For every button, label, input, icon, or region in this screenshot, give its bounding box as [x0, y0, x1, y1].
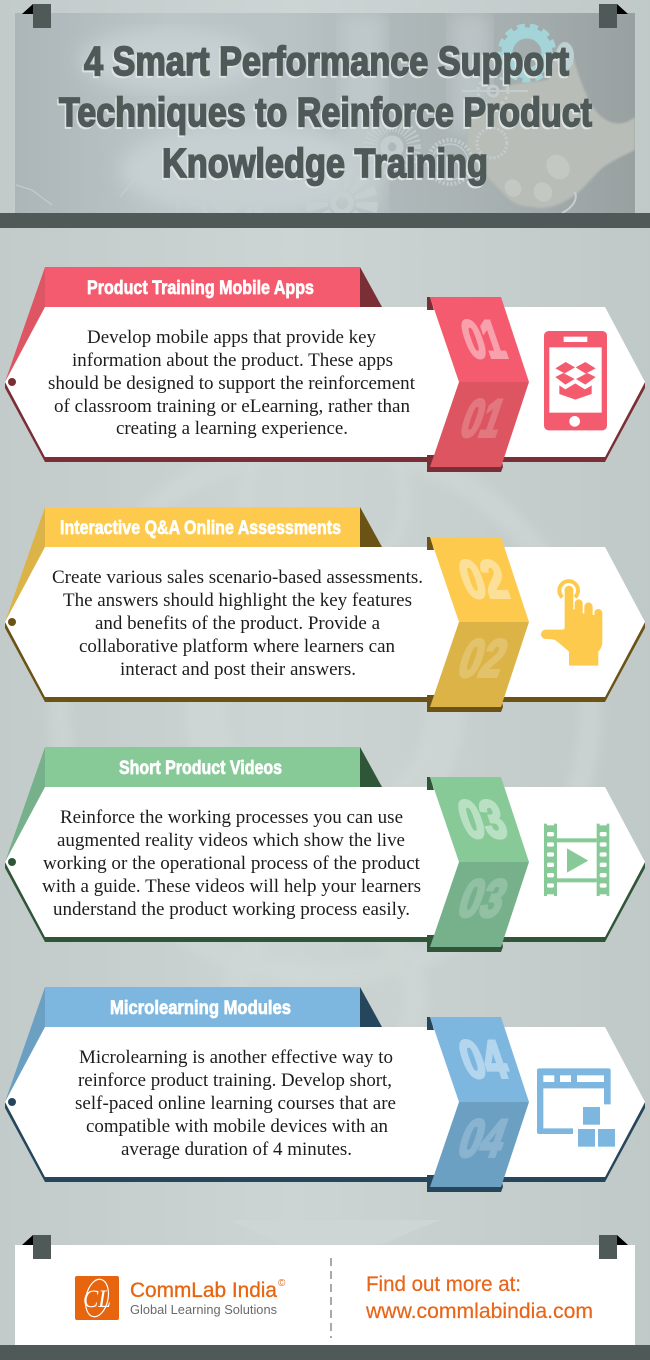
body text [75, 1048, 396, 1160]
body text: creating a learning experience. [116, 419, 348, 439]
title text [58, 38, 592, 188]
body text: of classroom training or eLearning, rather than [54, 397, 410, 417]
fingernails [501, 42, 574, 205]
lower watermark shape [228, 1220, 440, 1245]
banner photo background [15, 13, 635, 213]
hand [467, 43, 635, 208]
number chevron 02 [427, 537, 529, 712]
panel: footer [15, 1245, 635, 1345]
teal gear [500, 26, 554, 80]
number chevron 01 [427, 297, 529, 472]
title shadow: 4 Smart Performance Support [82, 40, 568, 86]
body text: self-paced online learning courses that are [75, 1094, 396, 1114]
icon: film strip with play button [544, 822, 609, 897]
title banner [15, 13, 635, 213]
number chevron 03: 03 [451, 790, 514, 849]
number chevron 03 [427, 777, 529, 952]
number chevron 03: 03 [451, 869, 515, 928]
heading [45, 987, 360, 1027]
title lines: Knowledge Training [162, 140, 488, 186]
call to action: www.commlabindia.com [365, 1300, 593, 1323]
footer pins [22, 1235, 628, 1259]
title shadow: Knowledge Training [160, 142, 486, 188]
top pins [22, 4, 628, 28]
body text: Microlearning is another effective way to [79, 1048, 393, 1068]
heading: Short Product Videos [119, 757, 282, 779]
number chevron 01: 01 [454, 389, 512, 448]
body text: with a guide. These videos will help your learners [42, 877, 421, 897]
heading: Product Training Mobile Apps [87, 277, 314, 299]
body text: interact and post their answers. [120, 660, 356, 680]
title lines [59, 38, 592, 186]
logo: CommLab India [130, 1279, 277, 1302]
body text [48, 328, 416, 439]
body text: Create various sales scenario-based assessments. [52, 568, 423, 588]
body text: Reinforce the working processes you can use [60, 808, 403, 828]
title lines: 4 Smart Performance Support [84, 38, 569, 84]
heading [45, 747, 360, 787]
body text: augmented reality videos which show the live [57, 831, 405, 851]
number chevron 04 [427, 1017, 529, 1192]
title shadow [58, 40, 591, 188]
number chevron 04: 04 [451, 1109, 515, 1168]
heading: Microlearning Modules [110, 997, 291, 1019]
number chevron 02: 02 [452, 550, 515, 609]
background watermark [60, 420, 590, 1090]
body text: The answers should highlight the key features [63, 591, 412, 611]
icon: pointing hand [541, 581, 602, 666]
body text: information about the product. These apps [72, 351, 393, 371]
bottom bar [0, 1345, 650, 1360]
heading: Interactive Q&A Online Assessments [60, 517, 341, 539]
number chevron 04: 04 [452, 1030, 516, 1089]
logo: Global Learning Solutions [130, 1303, 277, 1317]
top bar [0, 213, 650, 228]
number chevron 01: 01 [454, 310, 513, 369]
panel: Short Product Videos [5, 747, 645, 952]
body text: understand the product working process easily. [53, 900, 410, 920]
number chevron 02: 02 [451, 629, 515, 688]
body text [52, 568, 423, 680]
heading [45, 507, 360, 547]
body text: working or the operational process of the product [43, 854, 421, 874]
panel: Microlearning Modules [5, 987, 645, 1192]
body text [42, 808, 421, 920]
icon: browser window with modules [537, 1068, 615, 1147]
icon: mobile phone with box [544, 331, 607, 430]
body text: reinforce product training. Develop short, [78, 1071, 392, 1091]
call to action [365, 1273, 593, 1323]
small gears [16, 76, 528, 213]
heading [45, 267, 360, 307]
body text: collaborative platform where learners can [79, 637, 395, 657]
call to action: Find out more at: [366, 1273, 521, 1296]
body text: and benefits of the product. Provide a [95, 614, 380, 634]
logo [75, 1276, 286, 1320]
logo: CL [83, 1286, 111, 1313]
panel: Product Training Mobile Apps [5, 267, 645, 472]
panel: Interactive Q&A Online Assessments [5, 507, 645, 712]
body text: should be designed to support the reinforcement [48, 374, 416, 394]
body text: Develop mobile apps that provide key [87, 328, 377, 348]
logo: © [278, 1278, 286, 1289]
body text: compatible with mobile devices with an [86, 1117, 388, 1137]
body text: average duration of 4 minutes. [121, 1140, 352, 1160]
